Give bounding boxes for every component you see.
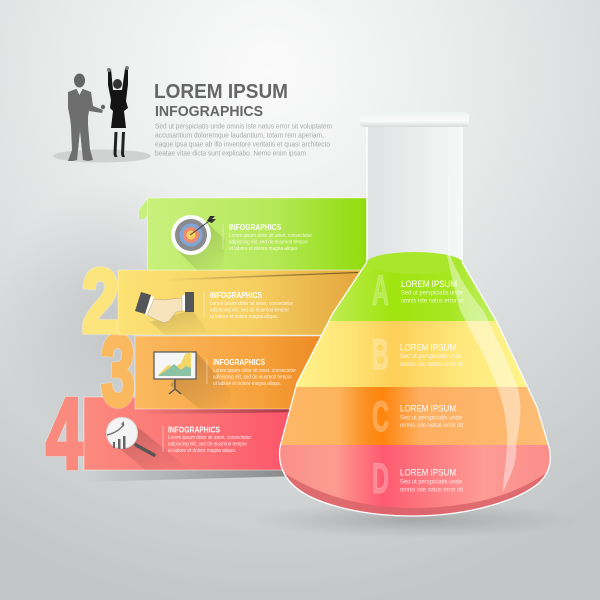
text: INFOGRAPHICS	[210, 291, 263, 300]
section A: omnis iste natus error sit	[401, 298, 464, 304]
band	[135, 336, 345, 409]
text	[210, 291, 293, 320]
digit 1: 1	[137, 183, 163, 283]
digit 2: 2	[82, 252, 119, 352]
intro paragraph: Sed ut perspiciatis unde omnis iste natus error sit voluptatem	[155, 124, 332, 130]
text: adipiscing elit, sed do eiusmod tempor	[229, 240, 308, 246]
text: Lorem ipsum dolor sit amet, consectetur	[229, 233, 312, 239]
rim	[360, 112, 469, 127]
wedge shadow	[135, 409, 310, 414]
band	[118, 270, 363, 335]
section B: B	[372, 331, 389, 379]
text: adipiscing elit, sed do eiusmod tempor	[213, 374, 292, 380]
section D	[372, 455, 463, 503]
text: ut labore et dolore magna aliqua.	[213, 381, 281, 387]
businesswoman	[107, 66, 129, 157]
neck	[367, 125, 462, 265]
section B: Sed ut perspiciatis unde	[400, 353, 462, 360]
intro paragraph: eaque ipsa quae ab illo inventore veritatis et quasi architecto	[155, 142, 330, 148]
ground ellipse	[53, 150, 151, 162]
section A: A	[372, 267, 389, 315]
wedge shadow under green banner	[165, 272, 358, 281]
section B: omnis iste natus error sit	[400, 361, 463, 368]
section D: D	[372, 455, 389, 503]
divider	[162, 426, 164, 452]
intro paragraph	[155, 124, 332, 158]
intro paragraph: beatae vitae dicta sunt explicabo. Nemo enim ipsam	[155, 150, 306, 158]
subtitle: INFOGRAPHICS	[155, 103, 263, 120]
text: adipiscing elit, sed do eiusmod tempor	[210, 308, 289, 314]
neck highlight	[448, 175, 450, 256]
digit 4: 4	[46, 378, 83, 490]
section A: Sed ut perspiciatis unde	[401, 290, 463, 296]
divider	[222, 224, 224, 249]
section D: Sed ut perspiciatis unde	[400, 478, 462, 486]
band	[84, 397, 314, 470]
divider	[206, 359, 208, 384]
icon: handshake	[135, 292, 210, 335]
text: ut labore et dolore magna aliqua	[229, 246, 297, 252]
liquid layers	[280, 264, 550, 516]
text: adipiscing elit, sed do eiusmod tempor	[168, 442, 247, 448]
icon: target with arrow	[171, 215, 225, 270]
people illustration	[53, 66, 151, 162]
section C: C	[372, 393, 389, 441]
text: ut labore et dolore magna aliqua.	[210, 314, 278, 320]
liquid top surface	[366, 252, 462, 274]
flask outline	[280, 262, 550, 516]
flask shadow	[250, 502, 580, 538]
divider	[203, 292, 205, 317]
step 4: red banner	[46, 378, 314, 490]
flask	[270, 112, 560, 520]
digit 3: 3	[101, 315, 135, 427]
intro paragraph: accusantium doloremque laudantium, totam rem aperiam,	[155, 132, 324, 140]
text: INFOGRAPHICS	[213, 358, 266, 367]
step 3: orange banner	[101, 315, 345, 427]
wedge shadow	[84, 470, 300, 482]
section C: LOREM IPSUM	[400, 404, 456, 414]
section C: omnis iste natus error sit	[400, 422, 463, 429]
band	[148, 198, 370, 270]
text: INFOGRAPHICS	[229, 223, 282, 232]
text: ut labore et dolore magna aliqua.	[168, 448, 236, 454]
section C: Sed ut perspiciatis unde	[400, 414, 462, 422]
section A	[372, 267, 464, 315]
text	[168, 426, 251, 454]
text	[213, 358, 296, 387]
text: Lorem ipsum dolor sit amet, consectetur	[168, 435, 251, 441]
text: INFOGRAPHICS	[168, 426, 221, 434]
glass highlight	[447, 255, 520, 492]
section D: omnis iste natus error sit	[400, 486, 463, 494]
icon: magnifier with chart	[106, 418, 190, 470]
section B: LOREM IPSUM	[400, 342, 456, 354]
section D: LOREM IPSUM	[400, 468, 456, 478]
section A: LOREM IPSUM	[401, 279, 457, 290]
text: Lorem ipsum dolor sit amet, consectetur	[210, 301, 293, 307]
text	[229, 223, 312, 252]
icon: presentation board	[154, 352, 230, 409]
section C	[372, 393, 463, 441]
section B	[372, 331, 463, 379]
step 1: green banner	[138, 198, 366, 270]
text: Lorem ipsum dolor sit amet, consectetur	[213, 368, 296, 374]
businessman	[68, 74, 105, 161]
title: LOREM IPSUM	[154, 81, 288, 103]
step 2: yellow banner	[82, 252, 363, 352]
